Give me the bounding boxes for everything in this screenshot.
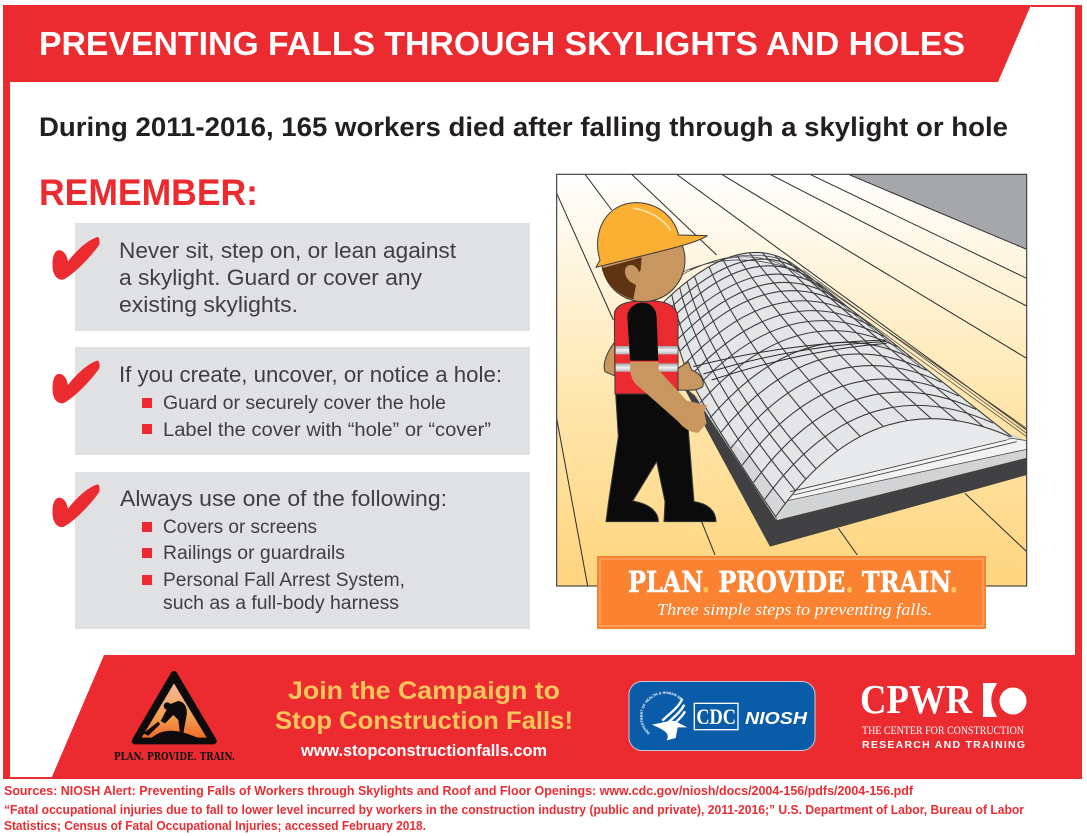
- text: skylight rule: [119, 238, 456, 317]
- picture frame: [557, 174, 1027, 586]
- logo: CPWR: [860, 676, 1026, 751]
- text: protection rule: Covers or screens: [163, 517, 317, 538]
- logo: stop falls triangle: [114, 674, 235, 763]
- cover fold seam: [693, 340, 887, 380]
- callout: plan provide train: PLAN. PROVIDE. TRAIN.: [628, 565, 958, 599]
- text: hole rule: Label the cover with “hole” or “cover”: [163, 420, 491, 441]
- logo: HHS CDC NIOSH: [628, 681, 816, 751]
- icon: check mark 1: [53, 237, 100, 280]
- skylight dome: [664, 252, 1012, 518]
- text: protection rule: Personal Fall Arrest System,: [163, 570, 405, 591]
- back arm: [604, 342, 617, 377]
- legs: [606, 394, 716, 522]
- vest: [614, 301, 678, 394]
- remember heading: REMEMBER:: [39, 172, 258, 213]
- panel: hole rule: [53, 347, 530, 455]
- ear: [625, 265, 639, 283]
- logo: CPWR: RESEARCH AND TRAINING: [862, 739, 1025, 751]
- far hand: [678, 362, 703, 390]
- logo: CPWR: THE CENTER FOR CONSTRUCTION: [862, 725, 1025, 737]
- callout: plan provide train: [597, 556, 986, 629]
- text: skylight rule: Never sit, step on, or lean against: [119, 238, 456, 263]
- text: hole rule: If you create, uncover, or notice a hole:: [119, 362, 502, 387]
- subtitle statistic: During 2011-2016, 165 workers died after falling through a skylight or hole: [39, 112, 1008, 142]
- logo: HHS CDC NIOSH: NIOSH: [745, 708, 808, 728]
- near arm and hand: [630, 362, 707, 433]
- text: protection rule: Always use one of the following:: [120, 486, 447, 511]
- logo: HHS CDC NIOSH: CDC: [696, 704, 736, 729]
- callout: plan provide train: Three simple steps to preventing falls.: [657, 600, 932, 619]
- sleeve: [627, 303, 658, 361]
- skylight curb: [683, 387, 1027, 547]
- text: protection rule: [120, 486, 447, 614]
- hard hat: [596, 203, 707, 267]
- cover grid: cross arcs: [664, 252, 1010, 517]
- panel: skylight rule: [53, 223, 530, 331]
- sources: Statistics; Census of Fatal Occupational Injuries; accessed February 2018.: [4, 819, 426, 833]
- sources: “Fatal occupational injuries due to fall to lower level incurred by workers in the construction industry (public and private), 2011-2016;” U.S. Department of Labor, Bureau of Labor: [4, 803, 1024, 817]
- text: skylight rule: existing skylights.: [119, 292, 298, 317]
- text: skylight rule: a skylight. Guard or cover any: [119, 265, 422, 290]
- logo: HHS CDC NIOSH: DEPARTMENT OF HEALTH & HUMAN SERVICES USA: [640, 691, 682, 735]
- worker: [596, 203, 716, 522]
- title banner: [3, 5, 1031, 82]
- roof seam lines: [557, 174, 1027, 586]
- sources: Sources: NIOSH Alert: Preventing Falls of Workers through Skylights and Roof and Floor Openings: www.cdc.gov/niosh/docs/2004-156/pdfs/2004-156.pdf: [4, 784, 914, 798]
- text: hole rule: Guard or securely cover the hole: [163, 393, 446, 414]
- grey roof area: [848, 174, 1027, 249]
- panel: protection rule: [53, 472, 530, 629]
- text: protection rule: Railings or guardrails: [163, 543, 345, 564]
- translucent back of dome: [678, 255, 1027, 437]
- frame edges: [776, 440, 1027, 521]
- logo: CPWR: CPWR: [860, 676, 972, 722]
- campaign call to action: [275, 677, 573, 760]
- hair: [602, 257, 642, 299]
- reflective stripes: [616, 346, 678, 372]
- cover grid: lengthwise lines: [664, 253, 1012, 517]
- text: hole rule: [119, 362, 502, 441]
- sources: [4, 784, 1024, 833]
- logo: stop falls triangle: PLAN. PROVIDE. TRAIN.: [114, 749, 235, 763]
- campaign call to action: Join the Campaign to: [288, 677, 560, 705]
- footer band: [52, 655, 1075, 779]
- illustration: worker beside covered skylight: [557, 174, 1027, 586]
- campaign call to action: Stop Construction Falls!: [275, 707, 573, 735]
- title banner: PREVENTING FALLS THROUGH SKYLIGHTS AND HOLES: [39, 25, 965, 62]
- icon: check mark 2: [53, 361, 100, 403]
- text: protection rule: such as a full-body harness: [163, 593, 399, 614]
- icon: HHS eagle: [662, 699, 685, 726]
- campaign call to action: www.stopconstructionfalls.com: [300, 741, 547, 760]
- skylight frame: [693, 393, 1027, 521]
- head: [602, 218, 685, 302]
- icon: check mark 3: [53, 484, 100, 527]
- roof floor: [557, 174, 1027, 586]
